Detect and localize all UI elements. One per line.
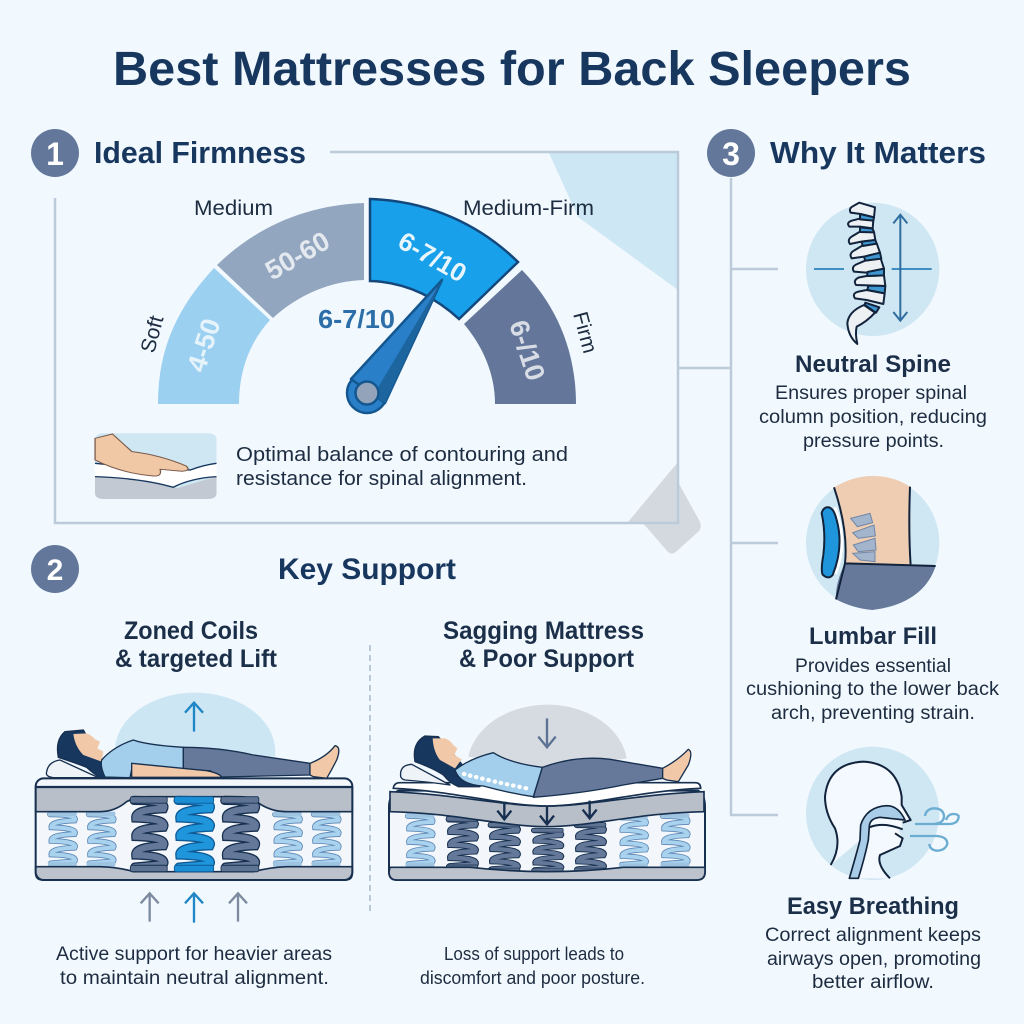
text: firmness note: Optimal balance of contouring and — [236, 444, 568, 466]
subheading: zoned coils: & targeted Lift — [115, 645, 278, 673]
badge 3 — [707, 129, 755, 177]
spine — [847, 203, 885, 344]
section: key support — [31, 545, 705, 989]
coils light — [406, 813, 689, 868]
icon: lumbar fill — [806, 476, 939, 610]
text: easy breathing — [765, 925, 981, 993]
lift arrow — [185, 703, 203, 732]
panel: ideal firmness — [31, 129, 701, 554]
coils zoned — [130, 797, 259, 872]
text: firmness note — [236, 444, 568, 490]
sagging caption — [420, 944, 645, 988]
illustration: sagging mattress — [389, 705, 705, 880]
foam layers — [36, 787, 352, 812]
lift halo — [115, 693, 275, 757]
label: soft: Soft — [137, 313, 169, 355]
heading: why it matters: Why It Matters — [770, 135, 986, 170]
subheading: zoned coils — [115, 617, 278, 673]
support arrows captions: to maintain neutral alignment. — [60, 968, 329, 989]
white gap — [835, 507, 842, 574]
gauge label: 4-50: 4-50 — [181, 315, 227, 376]
coils compressed — [446, 817, 606, 873]
section: why it matters — [678, 129, 1000, 993]
label: firm: Firm — [568, 309, 601, 356]
label: medium: Medium — [194, 197, 273, 220]
support arrows captions — [56, 944, 332, 989]
badge 2 — [31, 545, 79, 593]
needle — [347, 280, 442, 413]
sagging caption: discomfort and poor posture. — [420, 968, 645, 988]
badge 1 — [31, 129, 79, 177]
spine dots — [464, 774, 527, 788]
gauge label: 6-7/10 on segment: 6-7/10 — [393, 225, 472, 288]
heading: easy breathing: Easy Breathing — [787, 893, 959, 920]
text: lumbar fill: arch, preventing strain. — [771, 703, 975, 724]
coils light — [48, 812, 340, 867]
text: neutral spine — [759, 383, 987, 452]
badge 2: 2 — [47, 554, 63, 587]
gauge label: 6-/10: 6-/10 — [503, 316, 551, 384]
badge 3: 3 — [722, 136, 740, 172]
illustration: zoned coils mattress — [36, 693, 352, 923]
icon: neutral spine — [806, 203, 939, 344]
sagging caption: Loss of support leads to — [444, 944, 624, 964]
sag arrow — [538, 718, 556, 747]
text: lumbar fill: cushioning to the lower back — [746, 679, 1000, 700]
subheading: zoned coils: Zoned Coils — [124, 617, 258, 645]
support arrows — [141, 893, 247, 923]
person — [401, 736, 691, 797]
gauge segment: firm — [464, 270, 576, 404]
panel corner: grey fold — [628, 462, 701, 554]
heading: ideal firmness: Ideal Firmness — [94, 135, 306, 170]
text: lumbar fill: Provides essential — [795, 656, 951, 677]
support arrows captions: Active support for heavier areas — [56, 944, 332, 965]
heading: key support: Key Support — [278, 553, 456, 586]
text: easy breathing: airways open, promoting — [767, 949, 981, 970]
text: easy breathing: Correct alignment keeps — [765, 925, 981, 946]
title: Best Mattresses for Back Sleepers — [113, 43, 911, 96]
subheading: sagging mattress: & Poor Support — [459, 645, 635, 673]
gauge segment: medium — [217, 203, 364, 318]
subheading: sagging mattress — [443, 617, 644, 673]
text: firmness note: resistance for spinal alignment. — [236, 468, 527, 490]
gauge — [137, 197, 601, 413]
lumbar cushion — [822, 507, 840, 577]
text: easy breathing: better airflow. — [812, 972, 934, 993]
foam layers — [390, 792, 704, 827]
label: medium-firm: Medium-Firm — [463, 197, 594, 220]
icon: hand on mattress — [95, 433, 216, 499]
mattress — [36, 778, 352, 880]
text: lumbar fill — [746, 656, 1000, 724]
mattress — [389, 783, 705, 880]
heading: neutral spine: Neutral Spine — [795, 351, 951, 378]
heading: lumbar fill: Lumbar Fill — [809, 623, 937, 650]
vertebrae — [851, 513, 876, 562]
gauge segment: soft — [158, 268, 270, 404]
person — [46, 730, 339, 778]
subheading: sagging mattress: Sagging Mattress — [443, 617, 644, 645]
gauge label: 50-60: 50-60 — [260, 226, 335, 286]
sag arrows — [497, 801, 597, 824]
text: neutral spine: column position, reducing — [759, 407, 987, 428]
icon: easy breathing — [806, 747, 959, 880]
panel corner: blue triangle — [549, 153, 678, 290]
gauge value: 6-7/10 — [318, 304, 395, 334]
text: neutral spine: pressure points. — [803, 431, 944, 452]
badge 1: 1 — [46, 136, 64, 172]
text: neutral spine: Ensures proper spinal — [775, 383, 967, 404]
sag halo — [468, 705, 627, 770]
gauge segment: medium-firm — [370, 199, 518, 319]
